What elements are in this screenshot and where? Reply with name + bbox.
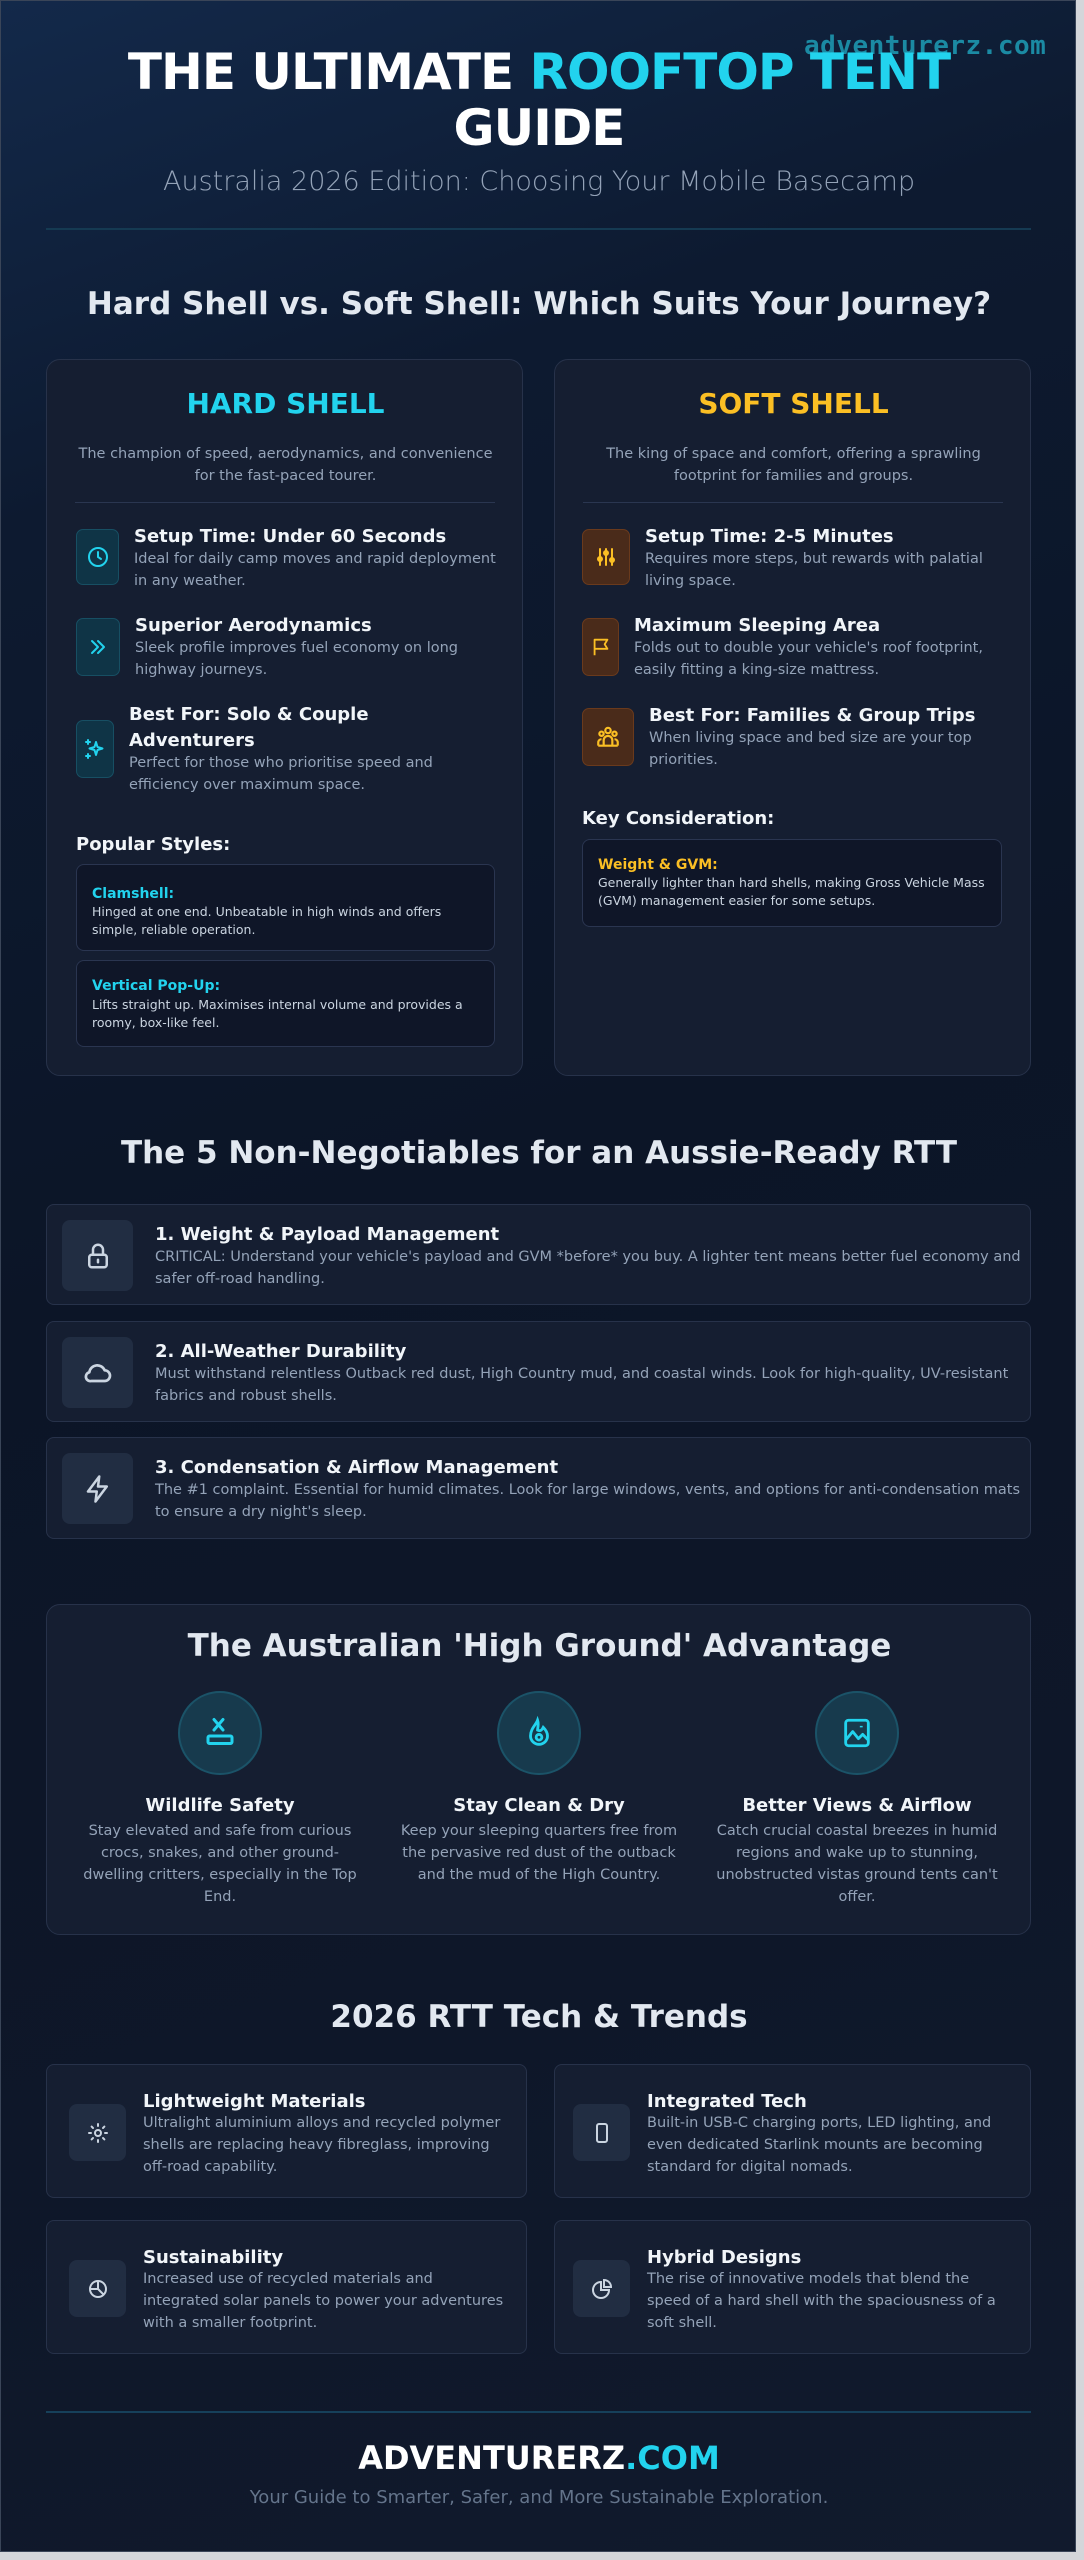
icon: sun [69,2104,126,2161]
row: all-weather: Must withstand relentless Outback red dust, High Country mud, and coastal winds. Look for high-quality, UV-resistant fabrics and robust shells. [155,1366,1008,1404]
feature: clean & dry [401,1691,677,1883]
item: aerodynamics: Sleek profile improves fuel economy on long highway journeys. [135,640,458,678]
item: sleeping area: Maximum Sleeping Area [634,615,880,636]
item: setup time: Ideal for daily camp moves and rapid deployment in any weather. [134,551,496,589]
box: clamshell: Hinged at one end. Unbeatable in high winds and offers simple, reliable operation. [92,904,441,937]
icon: sliders [582,529,630,585]
icon: globe [69,2260,126,2317]
box: vertical pop-up: Vertical Pop-Up: [92,978,220,994]
row: condensation: The #1 complaint. Essential for humid climates. Look for large windows, vents, and options for anti-condensation mats to ensure a dry night's sleep. [155,1482,1020,1520]
icon: picture [815,1691,899,1775]
row: condensation [46,1437,1031,1539]
icon: bolt [62,1453,133,1524]
panel: high ground advantage [46,1604,1031,1935]
box: clamshell: Clamshell: [92,886,174,902]
feature: wildlife safety: Wildlife Safety [145,1795,295,1816]
box: vertical pop-up [76,960,495,1047]
item: setup time: Setup Time: Under 60 Seconds [134,526,446,547]
card: lightweight materials: Lightweight Materials [143,2091,365,2112]
item: aerodynamics [76,615,458,678]
footer brand: ADVENTURERZ.COM [358,2439,720,2477]
card: hybrid designs: Hybrid Designs [647,2247,801,2268]
icon: pie [573,2260,630,2317]
item: aerodynamics: Superior Aerodynamics [135,615,372,636]
box: clamshell [76,864,495,951]
heading: tech & trends: 2026 RTT Tech & Trends [330,1999,748,2035]
row: weight & payload [46,1204,1031,1305]
soft shell title: SOFT SHELL [698,387,889,420]
row: condensation: 3. Condensation & Airflow Management [155,1457,558,1478]
item: setup time soft: Setup Time: 2-5 Minutes [645,526,894,547]
row: all-weather: 2. All-Weather Durability [155,1341,406,1362]
title: GUIDE [454,99,624,157]
feature: wildlife safety: Stay elevated and safe from curious crocs, snakes, and other ground-dwelling critters, especially in the Top End. [83,1823,357,1905]
feature: clean & dry: Stay Clean & Dry [453,1795,625,1816]
feature: clean & dry: Keep your sleeping quarters free from the pervasive red dust of the outback and the mud of the High Country. [401,1823,677,1883]
watermark: adventurerz.com [804,31,1046,61]
feature: wildlife safety [83,1691,357,1905]
hard shell title: HARD SHELL [186,387,385,420]
item: sleeping area: Folds out to double your vehicle's roof footprint, easily fitting a king-size mattress. [634,640,983,678]
title [128,43,951,157]
panel: soft shell [554,359,1031,1076]
title: THE ULTIMATE ROOFTOP TENT [128,43,950,101]
icon: wildlife [178,1691,262,1775]
card: integrated tech [554,2064,1031,2198]
box: weight & gvm [582,839,1002,927]
box: weight & gvm: Generally lighter than hard shells, making Gross Vehicle Mass (GVM) management easier for some setups. [598,875,985,908]
heading: hard vs soft: Hard Shell vs. Soft Shell: Which Suits Your Journey? [87,286,991,322]
footer tagline: Your Guide to Smarter, Safer, and More Sustainable Exploration. [250,2487,828,2508]
key consideration heading: Key Consideration: [582,808,774,829]
soft shell intro: The king of space and comfort, offering a sprawling footprint for families and groups. [606,446,981,484]
box: weight & gvm: Weight & GVM: [598,857,718,873]
card: hybrid designs [554,2220,1031,2354]
icon: cloud [62,1337,133,1408]
item: families [582,705,976,768]
icon: sparkles [76,720,114,778]
feature: views & airflow: Catch crucial coastal breezes in humid regions and wake up to stunning, unobstructed vistas ground tents can't offer. [716,1823,998,1905]
card: lightweight materials [46,2064,527,2198]
card: sustainability: Increased use of recycled materials and integrated solar panels to power your adventures with a smaller footprint. [143,2271,503,2331]
item: setup time soft [582,526,983,589]
card: integrated tech: Built-in USB-C charging ports, LED lighting, and even dedicated Starlink mounts are becoming standard for digital nomads. [647,2115,991,2175]
hard shell intro: The champion of speed, aerodynamics, and convenience for the fast-paced tourer. [78,446,492,484]
item: best for solo: Perfect for those who prioritise speed and efficiency over maximum space. [129,755,433,793]
icon: flag [582,618,619,676]
icon: lock [62,1220,133,1291]
popular styles heading: Popular Styles: [76,834,230,855]
heading: 5 non-negotiables: The 5 Non-Negotiables for an Aussie-Ready RTT [121,1135,957,1171]
card: lightweight materials: Ultralight aluminium alloys and recycled polymer shells are replacing heavy fibreglass, improving off-road capability. [143,2115,500,2175]
row: weight & payload: CRITICAL: Understand your vehicle's payload and GVM *before* you buy. A lighter tent means better fuel economy and safer off-road handling. [155,1249,1021,1287]
heading: high ground: The Australian 'High Ground' Advantage [188,1628,891,1664]
item: best for solo [76,704,433,793]
card: hybrid designs: The rise of innovative models that blend the speed of a hard shell with the spaciousness of a soft shell. [647,2271,996,2331]
item: best for solo: Best For: Solo & Couple Adventurers [129,704,369,751]
icon: group [582,708,634,766]
box: vertical pop-up: Lifts straight up. Maximises internal volume and provides a roomy, box-like feel. [92,997,463,1030]
feature: views & airflow: Better Views & Airflow [742,1795,972,1816]
item: setup time soft: Requires more steps, but rewards with palatial living space. [645,551,983,589]
card: sustainability: Sustainability [143,2247,283,2268]
item: setup time [76,526,496,589]
item: families: Best For: Families & Group Trips [649,705,976,726]
icon: flame drop [497,1691,581,1775]
feature: views & airflow [716,1691,998,1905]
panel: hard shell [46,359,523,1076]
subtitle: Australia 2026 Edition: Choosing Your Mobile Basecamp [163,166,915,197]
icon: clock [76,529,119,585]
icon: chevrons [76,618,120,676]
item: families: When living space and bed size are your top priorities. [649,730,972,768]
row: weight & payload: 1. Weight & Payload Management [155,1224,499,1245]
card: integrated tech: Integrated Tech [647,2091,807,2112]
icon: phone [573,2104,630,2161]
item: sleeping area [582,615,983,678]
row: all-weather [46,1321,1031,1422]
card: sustainability [46,2220,527,2354]
